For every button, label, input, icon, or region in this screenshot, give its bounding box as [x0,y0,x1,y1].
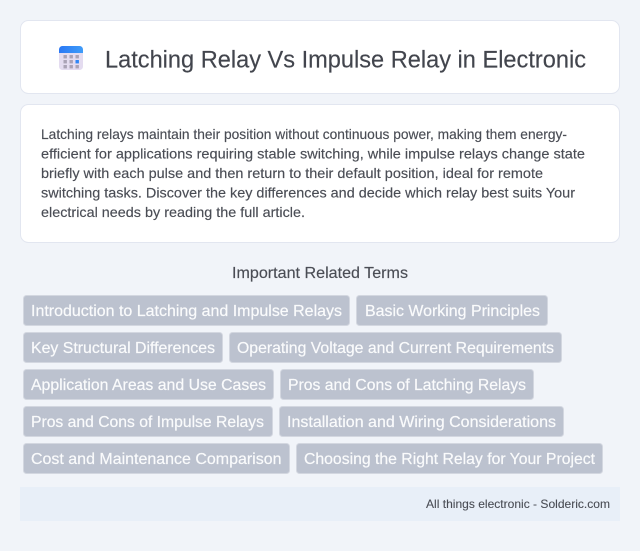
intro text block: Latching relays maintain their position without continuous power, making them energy- [41,126,567,142]
title: Latching Relay Vs Impulse Relay in Electronic [105,46,586,74]
intro text block: briefly with each pulse and then return to their default position, ideal for remote [41,165,543,181]
tag: Pros and Cons of Latching Relays [288,377,526,394]
heading: related terms: Important Related Terms [232,265,408,282]
tag: Introduction to Latching and Impulse Relays [31,303,342,320]
tag [230,332,562,362]
intro text block: switching tasks. Discover the key differences and decide which relay best suits Your [41,184,575,200]
tag: Pros and Cons of Impulse Relays [31,414,264,431]
intro text block: electrical needs by reading the full article. [41,204,305,220]
intro text block: efficient for applications requiring stable switching, while impulse relays change state [41,146,585,162]
tag [24,406,272,436]
tag [280,370,534,400]
tag [356,296,548,326]
panel: intro summary [20,104,620,242]
tag [280,406,564,436]
intro text block [41,126,585,220]
tag: Operating Voltage and Current Requirements [237,340,554,357]
tag [24,296,350,326]
footer bar [20,487,620,521]
tag [24,332,222,362]
tag: Installation and Wiring Considerations [287,414,556,431]
tag: Application Areas and Use Cases [31,377,266,394]
panel: term tags [24,296,602,474]
tag: Choosing the Right Relay for Your Project [304,451,596,468]
tag [24,444,290,474]
tag: Cost and Maintenance Comparison [31,451,282,468]
icon: calendar [59,46,83,70]
footer credit: All things electronic - Solderic.com [426,497,610,511]
tag: Key Structural Differences [31,340,215,357]
tag: Basic Working Principles [365,303,540,320]
tag [296,444,602,474]
title panel [20,20,620,94]
tag [24,370,274,400]
